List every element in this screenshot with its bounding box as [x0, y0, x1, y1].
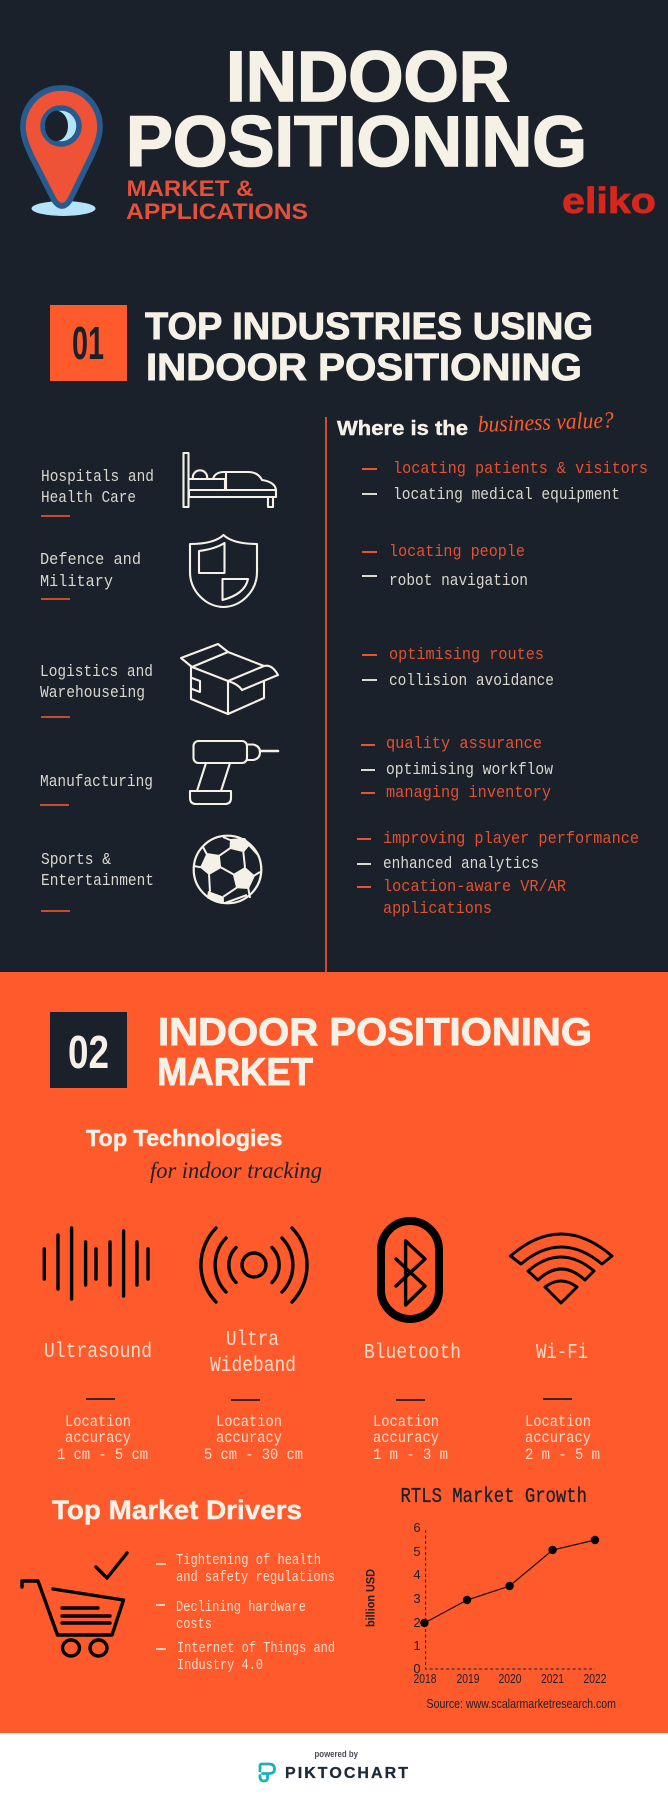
logo: eliko: eliko — [562, 180, 656, 221]
y axis labels: 4 — [413, 1567, 421, 1582]
label: Logistics and — [40, 663, 153, 682]
accuracy: accuracy — [525, 1429, 591, 1447]
icon: shopping cart with check — [22, 1553, 127, 1656]
accuracy: 5 cm - 30 cm — [204, 1446, 303, 1464]
label: Defence and — [40, 551, 141, 570]
value items: optimising routes — [389, 646, 544, 665]
heading: market: INDOOR POSITIONING — [158, 1011, 592, 1054]
label: Manufacturing — [40, 773, 153, 792]
y axis labels: 2 — [413, 1615, 421, 1630]
chart title: RTLS Market Growth — [400, 1486, 587, 1509]
axes — [426, 1530, 595, 1669]
business value heading: Where is the — [337, 418, 468, 440]
icon: radio waves — [201, 1228, 307, 1302]
driver dashes — [156, 1564, 166, 1649]
number badge 02: 02 — [68, 1026, 109, 1078]
icon: box — [181, 644, 278, 714]
icon: piktochart logo — [260, 1764, 274, 1781]
icon: wifi — [510, 1234, 612, 1303]
y axis labels: 0 — [413, 1661, 421, 1676]
underline — [41, 598, 70, 600]
divider — [543, 1398, 572, 1400]
value items: locating medical equipment — [393, 486, 620, 505]
label: Military — [40, 573, 113, 592]
technology: wi-fi — [510, 1234, 612, 1464]
icon: bluetooth — [381, 1221, 439, 1319]
technology: ultrasound — [44, 1228, 152, 1464]
driver list: and safety regulations — [176, 1570, 335, 1586]
technology: bluetooth — [364, 1221, 461, 1464]
driver list: costs — [176, 1617, 212, 1633]
accuracy: accuracy — [373, 1429, 439, 1447]
industry: manufacturing — [40, 741, 278, 805]
divider — [86, 1398, 115, 1400]
icon: location pin — [23, 88, 100, 216]
name: Wi-Fi — [536, 1342, 588, 1365]
icon: bed — [184, 453, 276, 507]
name: Bluetooth — [364, 1342, 461, 1365]
accuracy: Location — [373, 1413, 439, 1431]
heading: market: MARKET — [157, 1051, 313, 1094]
divider line — [325, 417, 327, 972]
icon: football — [194, 836, 261, 904]
industry: hospitals — [41, 453, 276, 516]
driver list: Declining hardware — [176, 1600, 306, 1616]
technology: ultra wideband — [201, 1228, 307, 1464]
label — [41, 468, 154, 508]
y axis labels: 3 — [413, 1591, 421, 1606]
label: Warehouseing — [40, 684, 145, 703]
subtitle — [126, 176, 308, 224]
value items: enhanced analytics — [383, 855, 539, 874]
value items: improving player performance — [383, 830, 639, 849]
accuracy: 1 m - 3 m — [373, 1446, 448, 1464]
icon: shield — [190, 535, 257, 607]
panel: market background — [0, 972, 668, 1733]
accuracy: Location — [216, 1413, 282, 1431]
icon: sound wave — [44, 1228, 148, 1299]
x axis labels: 2019 — [456, 1671, 480, 1686]
label: Sports & — [41, 851, 111, 870]
label: Hospitals and — [41, 468, 154, 487]
y axis title: billion USD — [366, 1569, 378, 1627]
name — [210, 1329, 296, 1378]
label — [41, 851, 154, 891]
value items: locating people — [389, 543, 525, 562]
header — [23, 38, 656, 224]
heading: top industries: INDOOR POSITIONING — [146, 347, 582, 389]
underline — [41, 716, 70, 718]
value items: applications — [383, 900, 492, 919]
accuracy — [373, 1413, 448, 1464]
industry: defence — [40, 535, 257, 607]
dashes — [357, 469, 377, 887]
y axis labels: 6 — [413, 1520, 421, 1535]
value items: collision avoidance — [389, 672, 554, 691]
top technologies heading — [86, 1125, 322, 1183]
heading: top industries — [145, 306, 593, 389]
business value list — [357, 460, 648, 919]
x axis labels: 2020 — [498, 1671, 522, 1686]
value items — [383, 460, 648, 919]
divider — [396, 1399, 425, 1401]
label — [40, 551, 141, 592]
x axis labels — [414, 1671, 606, 1686]
top market drivers — [22, 1495, 335, 1674]
business value heading — [337, 407, 615, 440]
chart: RTLS market growth — [366, 1486, 616, 1711]
accuracy: 2 m - 5 m — [525, 1446, 600, 1464]
accuracy: Location — [525, 1413, 591, 1431]
label — [40, 663, 153, 703]
section 01 heading — [50, 305, 593, 389]
top technologies heading: for indoor tracking — [150, 1158, 322, 1183]
divider — [231, 1399, 260, 1401]
source: Source: www.scalarmarketresearch.com — [426, 1697, 616, 1711]
y axis labels — [413, 1520, 421, 1676]
value items: quality assurance — [386, 735, 542, 754]
panel: footer background — [0, 1733, 668, 1800]
x axis labels: 2018 — [414, 1671, 436, 1686]
accuracy: accuracy — [216, 1429, 282, 1447]
powered by: powered by — [314, 1749, 358, 1759]
number badge 02 — [50, 1012, 127, 1088]
data line — [420, 1536, 599, 1627]
value items: robot navigation — [389, 572, 528, 591]
name: Ultra — [226, 1329, 279, 1352]
x axis labels: 2021 — [541, 1671, 564, 1686]
accuracy: accuracy — [65, 1429, 131, 1447]
wordmark: PIKTOCHART — [285, 1765, 408, 1782]
driver list: Tightening of health — [176, 1553, 321, 1569]
driver list: Industry 4.0 — [177, 1658, 263, 1674]
underline — [41, 515, 70, 517]
panel: header and industries background — [0, 0, 668, 972]
footer — [260, 1749, 408, 1782]
number badge 01: 01 — [72, 317, 104, 369]
title: POSITIONING — [126, 103, 587, 182]
title — [126, 38, 587, 182]
value items: location-aware VR/AR — [383, 878, 566, 897]
accuracy — [204, 1413, 303, 1464]
label: Entertainment — [41, 872, 154, 891]
x axis labels: 2022 — [584, 1671, 606, 1686]
y axis labels: 5 — [413, 1544, 421, 1559]
icon: drill — [190, 741, 278, 804]
top technologies heading: Top Technologies — [86, 1125, 282, 1151]
y axis labels: 1 — [413, 1638, 421, 1653]
driver list — [176, 1553, 335, 1674]
heading: top industries: TOP INDUSTRIES USING — [145, 306, 593, 348]
label: Health Care — [41, 489, 136, 508]
value items: managing inventory — [386, 784, 551, 803]
industry: logistics — [40, 644, 278, 717]
number badge 01 — [50, 305, 127, 381]
subtitle: APPLICATIONS — [126, 199, 308, 224]
name: Wideband — [210, 1355, 296, 1378]
accuracy: 1 cm - 5 cm — [57, 1446, 148, 1464]
accuracy — [57, 1413, 148, 1464]
industry: sports — [41, 836, 261, 911]
subtitle: MARKET & — [126, 176, 254, 201]
underline — [41, 910, 70, 912]
driver list: Internet of Things and — [177, 1641, 335, 1657]
heading: market — [157, 1011, 592, 1094]
heading: Top Market Drivers — [52, 1495, 302, 1525]
value items: optimising workflow — [386, 761, 554, 780]
accuracy: Location — [65, 1413, 131, 1431]
underline — [40, 804, 69, 806]
title: INDOOR — [226, 38, 510, 117]
section 02 heading — [50, 1011, 592, 1094]
name: Ultrasound — [44, 1341, 152, 1364]
accuracy — [525, 1413, 600, 1464]
business value heading: business value? — [477, 407, 615, 437]
